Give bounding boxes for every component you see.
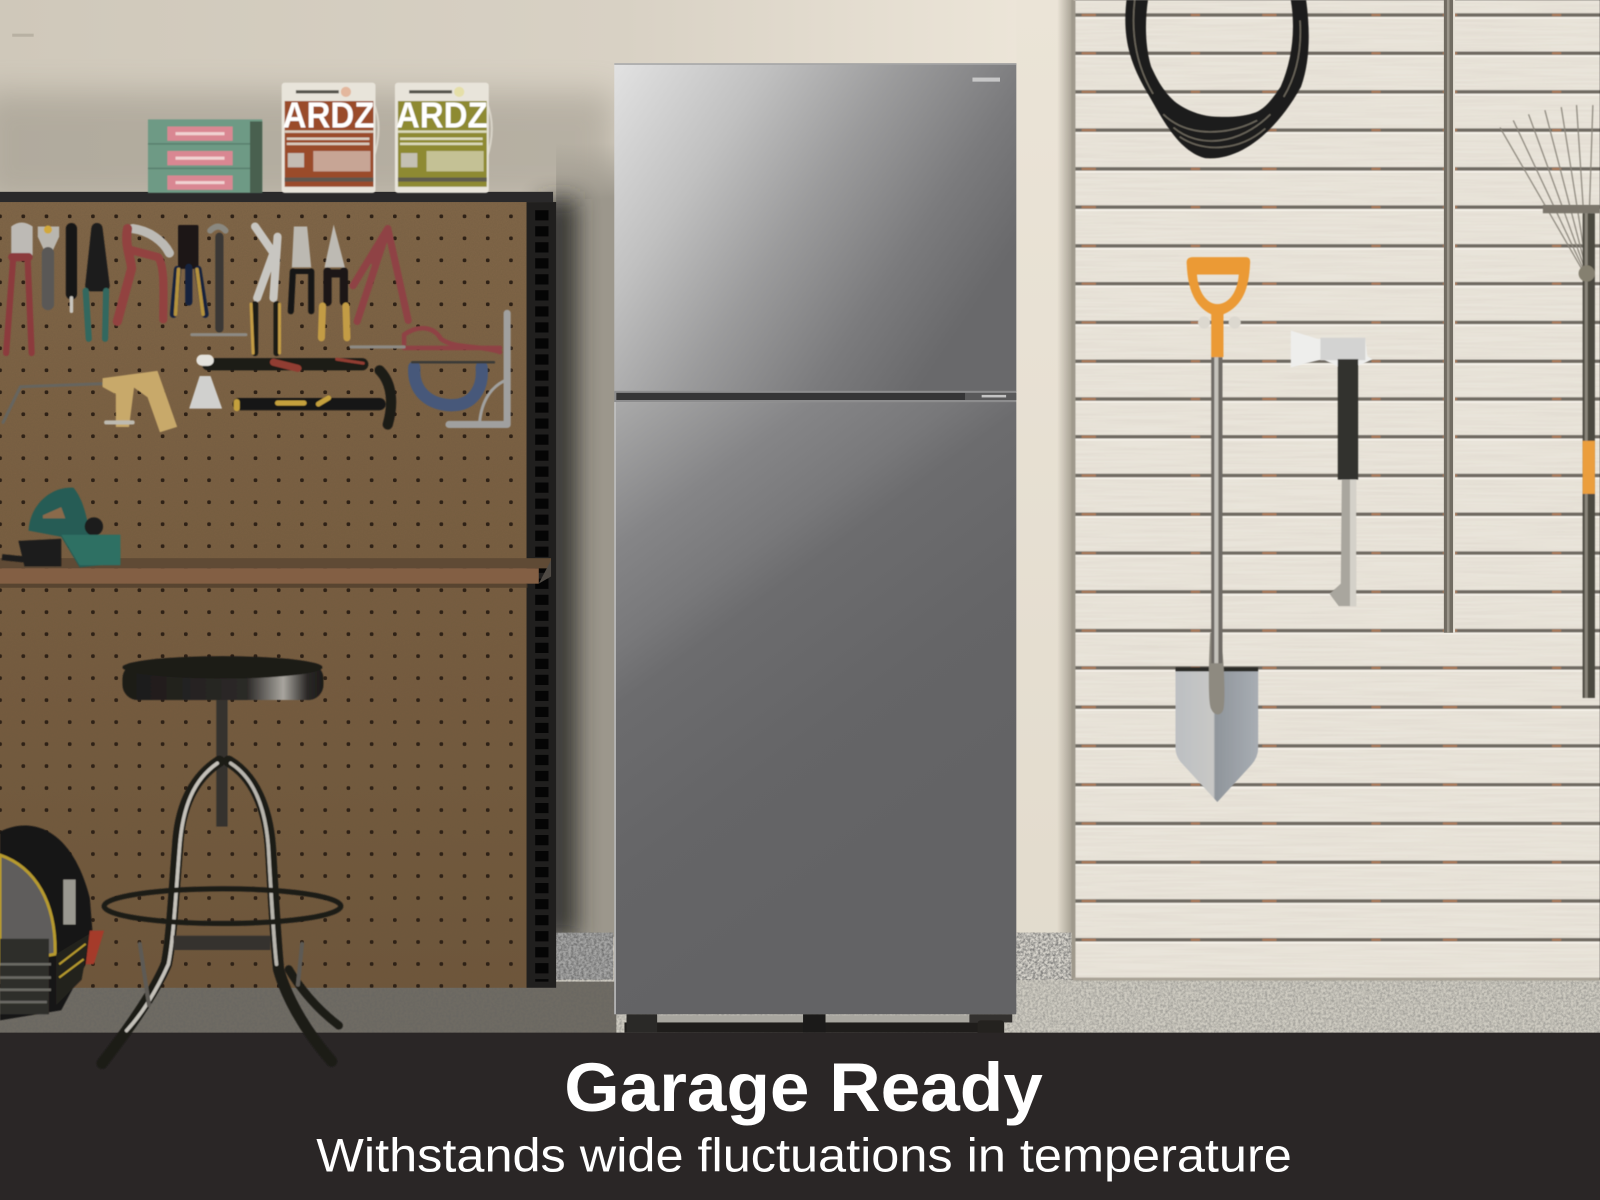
pipe cutter [117, 229, 169, 321]
floor and concrete base [0, 933, 1600, 1035]
crimping pliers [86, 229, 106, 339]
seat [122, 656, 323, 700]
wooden shelf [0, 558, 551, 588]
background: garage wall [0, 0, 1076, 1033]
icon: red paint can [282, 83, 379, 193]
panel: pegboard [0, 200, 528, 988]
wire stripper [173, 227, 205, 314]
vertical rail on slatwall [1444, 0, 1455, 633]
foot ring [104, 889, 341, 923]
icon: rake [1500, 105, 1600, 698]
icon: tool bag [0, 825, 104, 1020]
hacksaw [404, 328, 500, 352]
cross brace [173, 936, 270, 950]
t-handle wrench [192, 227, 246, 335]
panel: slatwall [1071, 0, 1600, 981]
bolt cutter [6, 222, 33, 353]
refrigerator [614, 63, 1016, 1041]
legs [102, 761, 339, 1063]
panel: caption band [0, 1033, 1600, 1200]
steel square [449, 313, 507, 424]
fridge door [614, 402, 1016, 1014]
left door edge [614, 402, 616, 1014]
tie tensioner [353, 229, 408, 321]
icon: olive paint can: ARDZ [396, 96, 488, 136]
water pump pliers [251, 227, 280, 353]
icon: shovel [1176, 257, 1258, 802]
pliers [291, 227, 311, 311]
icons: hand tools on pegboard [3, 222, 507, 432]
title: Garage Ready [564, 1050, 1043, 1126]
icon: olive paint can [395, 83, 492, 193]
screwdriver [66, 229, 77, 311]
icon: coiled garden hose [1125, 0, 1309, 158]
coping saw [3, 371, 177, 432]
wrench [38, 226, 59, 304]
micrometer [414, 367, 482, 405]
icon: red paint can: ARDZ [283, 96, 374, 136]
base and feet [624, 1014, 1012, 1041]
icon: green boxes [148, 119, 262, 193]
hatchet [190, 359, 363, 408]
subtitle: Withstands wide fluctuations in temperature [316, 1129, 1292, 1181]
tin snips [321, 224, 347, 338]
hacksaw blade [351, 345, 404, 348]
top shelf [0, 192, 553, 202]
icon: hand planer [2, 488, 120, 567]
door top edge [614, 63, 1016, 65]
brand mark [972, 78, 1000, 82]
icon: axe [1291, 331, 1372, 606]
shelving upright [527, 202, 556, 988]
icon: stool [102, 656, 341, 1063]
micrometer bar [412, 361, 494, 363]
centre post [216, 700, 228, 827]
freezer door [614, 63, 1016, 392]
door gap [614, 391, 1016, 402]
claw hammer [237, 370, 391, 424]
square brace [480, 380, 507, 422]
